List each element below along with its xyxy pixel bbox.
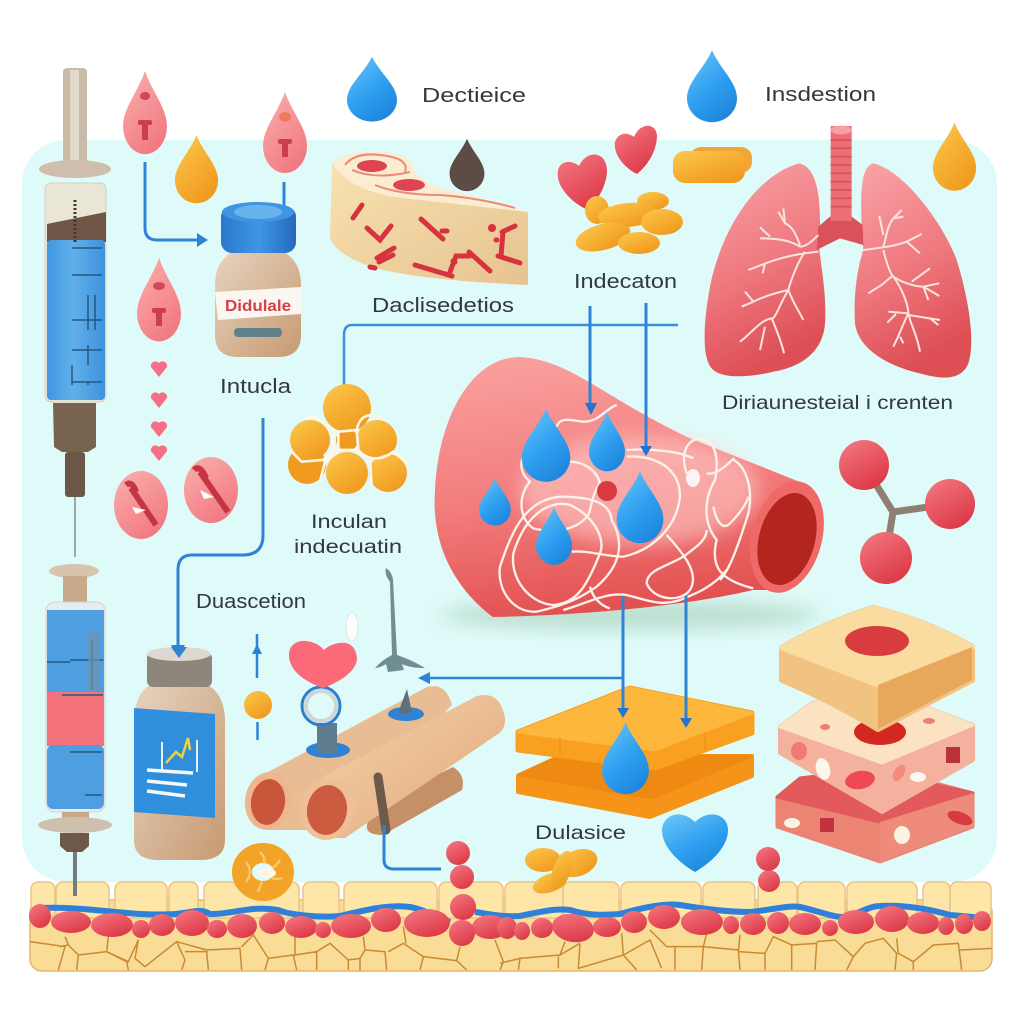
icon: red bead chain: [446, 841, 476, 946]
icon: large organ: [435, 357, 836, 617]
arrow: organ to slab two: [680, 596, 692, 728]
icon: small up arrow: [252, 634, 262, 678]
arrow: pink drop to bottle: [145, 162, 208, 247]
shadow under organ: [440, 599, 820, 631]
arrow: Indecaton down two: [640, 303, 652, 456]
icon: organ drops: [479, 409, 663, 565]
label: Dulasice: Dulasice: [535, 822, 626, 844]
icon: small hearts column: [151, 361, 167, 461]
icon: white droplet: [346, 613, 358, 641]
heading: Insdestion: Insdestion: [765, 84, 876, 106]
icon: orange molecule cluster: [288, 384, 409, 494]
icon: red cell right: [184, 457, 238, 523]
icon: Didulale bottle: [215, 202, 301, 357]
icon: yellow capsules: [573, 147, 752, 257]
icon: pink drop two: [263, 92, 307, 173]
label: Intucla: Intucla: [220, 376, 292, 398]
arrow: slab connector to tubes: [418, 672, 622, 684]
label: Daclisedetios: Daclisedetios: [372, 295, 514, 317]
icon: tubes: [241, 686, 505, 843]
icon: red bead pair: [756, 847, 780, 892]
label: Inculan indecuatin: Inculan: [311, 512, 387, 533]
icon: Didulale bottle: Didulale: [225, 298, 291, 315]
icon: orange ball with stem: [244, 691, 272, 740]
icon: orange knot: [525, 844, 601, 898]
icon: pink drop one: [123, 71, 167, 154]
icon: blue drop on slabs: [602, 722, 649, 794]
bottom tissue band: [29, 882, 992, 971]
icon: orange ring: [242, 852, 284, 892]
arrow: second drop to bottle: [282, 182, 286, 206]
arrow: organ to slab one: [617, 596, 629, 718]
icon: orange drop: [175, 135, 218, 203]
icon: yellow slabs: [518, 688, 752, 817]
icon: forceps tool: [375, 568, 425, 672]
icon: lungs: [705, 126, 971, 377]
arrow: connector to molecule cluster: [344, 325, 678, 386]
icon: dark drop: [450, 139, 484, 191]
icon: orange drop right: [933, 123, 976, 191]
arrow: into lower bottle: [171, 418, 263, 657]
label: Diriaunesteial i crenten: Diriaunesteial i crenten: [722, 392, 953, 414]
icon: pink drop three: [137, 258, 181, 341]
label: Inculan indecuatin: [294, 512, 402, 558]
heading: Dectieice: Dectieice: [422, 85, 526, 107]
label: Inculan indecuatin: indecuatin: [294, 537, 402, 558]
arrow: tube to cells: [384, 825, 441, 869]
icon: red molecule: [839, 440, 975, 584]
background panel: [22, 140, 997, 882]
icon: tissue wedge: [330, 152, 528, 285]
arrowhead on lower bottle cap: [171, 647, 187, 658]
icon: stacked tissue blocks: [777, 608, 974, 862]
icon: upper syringe: [39, 68, 111, 557]
icon: lower syringe: [38, 564, 112, 896]
label: Duascetion: Duascetion: [196, 591, 306, 613]
icon: red cell left: [114, 471, 168, 539]
arrow: Indecaton down one: [585, 306, 597, 415]
icon: top blue drop right: [687, 50, 737, 122]
icon: pink heart: [289, 641, 357, 688]
icon: top blue drop left: [347, 57, 397, 122]
label: Indecaton: Indecaton: [574, 271, 677, 293]
icon: blue heart: [662, 814, 728, 872]
icon: lower bottle: [134, 647, 225, 860]
icon: hearts top middle: [558, 126, 657, 210]
